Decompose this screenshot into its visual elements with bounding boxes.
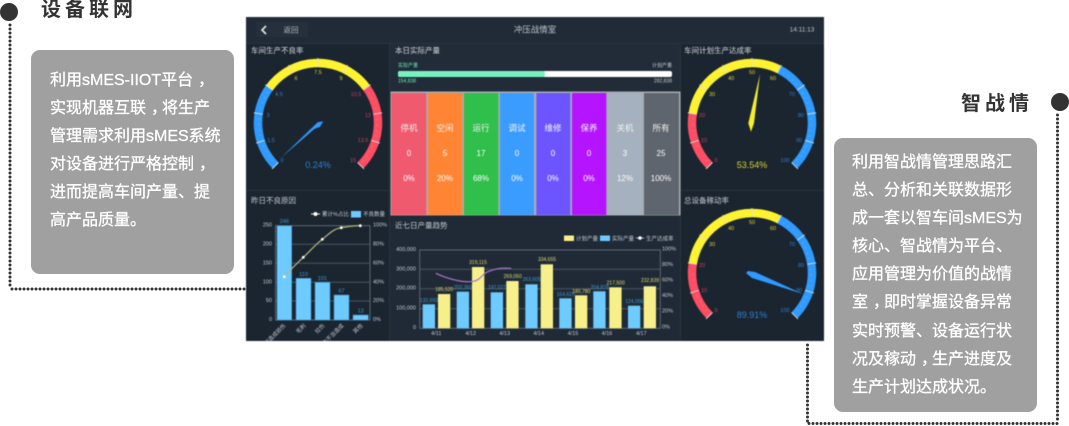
chart legend xyxy=(564,234,674,242)
bar value labels: 185,520 xyxy=(435,287,454,293)
category labels: 拉伤 xyxy=(313,321,327,335)
gauge: overall utilisation rate: 60 xyxy=(770,226,776,232)
bar value labels: 164,620 xyxy=(557,292,575,298)
status: repair: 0 xyxy=(551,149,556,158)
right axis labels: 20% xyxy=(373,298,384,304)
status: maintenance: 0 xyxy=(587,149,592,158)
status: running xyxy=(464,93,498,215)
right axis labels: 40% xyxy=(662,293,673,299)
right axis labels: 100% xyxy=(373,223,387,229)
left axis labels xyxy=(263,223,272,323)
status: debugging: 0% xyxy=(511,174,523,183)
gauge: plan achievement rate: 50 xyxy=(749,70,755,76)
status: powered off: 3 xyxy=(623,149,628,158)
gauge: workshop defect rate: 0 xyxy=(280,158,284,164)
right axis labels xyxy=(373,223,387,323)
pareto bar values xyxy=(280,219,364,314)
text block: 智战情 description: 室 ，即时掌握设备异常 xyxy=(852,294,1012,311)
gauge: workshop defect rate xyxy=(233,38,403,208)
status: running: 68% xyxy=(473,174,489,183)
bar value labels: 132,693 xyxy=(420,298,438,304)
chart legend: 实际产量 xyxy=(612,234,635,242)
text block: 智战情 description: 核心、智战情为平台、 xyxy=(852,238,1012,255)
right axis labels: 100% xyxy=(662,246,676,252)
heading: 智战情: 智战情 xyxy=(961,93,1033,115)
bar value labels: 202,360 xyxy=(454,285,472,291)
gauge: workshop defect rate: 10.5 xyxy=(351,92,361,98)
status: powered off: 关机 xyxy=(616,123,634,133)
pareto bar values: 101 xyxy=(318,276,327,282)
progress labels xyxy=(398,62,672,84)
right axis labels: 80% xyxy=(373,241,384,247)
achievement rate line xyxy=(436,268,511,282)
planned output bars xyxy=(438,264,656,328)
status: powered off xyxy=(608,93,642,215)
text block: 智战情 description: 生产计划达成状况。 xyxy=(852,379,996,396)
left axis labels: 200 xyxy=(263,241,272,247)
header bar xyxy=(256,22,815,37)
progress labels: 282,838 xyxy=(654,78,672,84)
gauge: overall utilisation rate: 50 xyxy=(749,220,755,226)
pareto bar values: 246 xyxy=(280,219,289,225)
gauge: overall utilisation rate: 30 xyxy=(709,242,715,248)
gauge: plan achievement rate: 90 xyxy=(796,138,802,144)
gauge heading: 车间计划生产达成率 xyxy=(684,45,752,55)
text block: 智战情 description: 成一套以智车间sMES为 xyxy=(852,210,1023,227)
status: all: 100% xyxy=(651,174,671,183)
status: debugging: 0 xyxy=(515,149,520,158)
gauge: workshop defect rate: 13.5 xyxy=(358,138,368,144)
chart: yesterday defect pareto xyxy=(251,195,387,359)
gauge: overall utilisation rate: 20 xyxy=(699,263,705,269)
gauge: workshop defect rate: 1.5 xyxy=(267,138,275,144)
status: maintenance: 保养 xyxy=(580,123,598,133)
pareto bars xyxy=(277,226,368,320)
status: repair xyxy=(536,93,570,215)
back label: 返回 xyxy=(284,26,298,34)
gauge: plan achievement rate: 80 xyxy=(798,113,804,119)
left axis labels: 250 xyxy=(263,223,272,229)
status: debugging: 调试 xyxy=(508,123,526,133)
left axis labels: 100,000 xyxy=(396,306,416,312)
right axis labels: 20% xyxy=(662,309,673,315)
status table xyxy=(390,92,680,216)
gauge needle xyxy=(281,121,323,158)
gauge: plan achievement rate: 100 xyxy=(780,158,790,164)
right axis labels xyxy=(662,246,676,330)
status: repair: 0% xyxy=(547,174,559,183)
dashboard screenshot xyxy=(245,16,825,342)
status: running: 运行 xyxy=(472,123,490,133)
panel: today's actual output xyxy=(390,45,680,216)
category labels: 毛刺 xyxy=(294,321,308,335)
status: repair: 维修 xyxy=(544,123,562,133)
progress labels: 实际产量 xyxy=(398,62,418,69)
gauge: plan achievement rate: 20 xyxy=(699,113,705,119)
left axis labels: 50 xyxy=(266,298,272,304)
pareto bar values: 67 xyxy=(338,288,345,294)
status: idle xyxy=(428,93,462,215)
bar value labels xyxy=(420,257,659,305)
bar value labels: 180,780 xyxy=(572,289,591,295)
status: powered off: 12% xyxy=(617,174,633,183)
connector: right dotted line xyxy=(806,114,1059,425)
status: idle: 5 xyxy=(443,149,448,158)
text block: 智战情 description: 况及稼动 ，生产进度及 xyxy=(852,351,1012,368)
gauge: workshop defect rate: 6 xyxy=(294,76,298,82)
status: all xyxy=(644,93,679,215)
text block: 设备联网 description: 利用sMES-IIOT平台 ， xyxy=(50,72,214,89)
right axis labels: 60% xyxy=(373,260,384,266)
gauge: overall utilisation rate xyxy=(667,188,837,358)
gauge: overall utilisation rate: 40 xyxy=(728,226,734,232)
left axis labels: 100 xyxy=(263,279,272,285)
gauge: overall utilisation rate: 80 xyxy=(798,263,804,269)
text block: 设备联网 description: 高产品质量。 xyxy=(50,212,146,229)
date labels: 4/11 xyxy=(431,331,441,337)
pareto bar values: 13 xyxy=(358,308,364,314)
gauge: plan achievement rate: 30 xyxy=(709,92,715,98)
date labels: 4/15 xyxy=(568,331,578,337)
category labels xyxy=(251,321,365,359)
icon: back chevron xyxy=(262,26,266,34)
category labels: 其他 xyxy=(351,321,365,335)
right axis labels: 80% xyxy=(662,262,673,268)
left axis labels: 200,000 xyxy=(396,286,416,292)
left axis labels: 150 xyxy=(263,260,272,266)
gauge needle xyxy=(748,74,760,132)
panel: 设备联网 description xyxy=(31,50,234,274)
bar value labels: 269,050 xyxy=(504,274,522,280)
bar value labels: 124,056 xyxy=(625,299,644,305)
chart legend: 生产达成率 xyxy=(646,234,674,242)
status: maintenance xyxy=(572,93,606,215)
date labels: 4/13 xyxy=(499,331,510,337)
clock: 14:11:13 xyxy=(790,26,815,34)
gauge value: 89.91% xyxy=(737,310,767,320)
gauge: workshop defect rate: 7.5 xyxy=(314,70,322,76)
chart legend: 不良数量 xyxy=(363,210,386,218)
bar value labels: 217,500 xyxy=(607,280,625,286)
date labels: 4/14 xyxy=(533,331,544,337)
gauge needle xyxy=(746,271,803,294)
actual output bars xyxy=(423,284,640,328)
gauge: plan achievement rate: 10 xyxy=(701,138,707,144)
gauge: plan achievement rate xyxy=(667,38,837,208)
left axis labels xyxy=(396,247,416,331)
progress labels: 154,838 xyxy=(398,78,416,84)
chart legend: 累计%占比 xyxy=(322,210,349,218)
gauge: overall utilisation rate: 100 xyxy=(780,308,790,314)
text block: 设备联网 description: 进而提高车间产量、提 xyxy=(50,184,210,201)
date labels: 4/16 xyxy=(602,331,612,337)
date labels: 4/12 xyxy=(465,331,476,337)
status: stopped xyxy=(391,93,426,215)
status: debugging xyxy=(500,93,534,215)
gauge: plan achievement rate: 60 xyxy=(770,76,776,82)
chart: seven day output trend xyxy=(395,220,676,337)
status: stopped: 0 xyxy=(407,149,412,158)
text block: 智战情 description: 总、分析和关联数据形 xyxy=(852,182,1012,199)
bar value labels: 319,115 xyxy=(469,260,487,266)
status: idle: 空闲 xyxy=(436,123,454,133)
pareto bar values: 110 xyxy=(299,272,308,278)
dashboard title: 冲压战情室 xyxy=(514,24,557,34)
right axis labels: 60% xyxy=(662,278,673,284)
gauge: plan achievement rate: 0 xyxy=(714,158,718,164)
status: all: 25 xyxy=(657,149,666,158)
gauge value: 0.24% xyxy=(305,160,331,170)
panel: 智战情 description xyxy=(834,138,1037,412)
gauge: overall utilisation rate: 0 xyxy=(714,308,718,314)
bar value labels: 334,655 xyxy=(538,257,556,263)
status: running: 17 xyxy=(477,149,486,158)
status: stopped: 0% xyxy=(403,174,415,183)
bar value labels: 263,605 xyxy=(523,277,541,283)
chart heading: 近七日产量趋势 xyxy=(395,220,448,230)
gauge: workshop defect rate: 9 xyxy=(339,76,343,82)
left axis labels: 0 xyxy=(413,325,416,331)
gauge heading: 总设备稼动率 xyxy=(684,195,729,205)
icon: left heading dot xyxy=(0,3,18,21)
bar value labels: 232,839 xyxy=(641,278,659,284)
gauge: overall utilisation rate: 10 xyxy=(701,288,707,294)
right axis labels: 0% xyxy=(373,317,381,323)
text block: 设备联网 description: 对设备进行严格控制 ， xyxy=(50,156,215,173)
left axis labels: 0 xyxy=(269,317,272,323)
date labels: 4/17 xyxy=(636,331,647,337)
text block: 设备联网 description: 实现机器互联 ，将生产 xyxy=(50,100,210,117)
gauge: overall utilisation rate: 70 xyxy=(789,242,795,248)
gauge: overall utilisation rate: 90 xyxy=(796,288,802,294)
text block: 设备联网 description: 管理需求利用sMES系统 xyxy=(50,128,221,145)
gauge: workshop defect rate: 3 xyxy=(266,113,270,119)
status: idle: 20% xyxy=(437,174,453,183)
gauge value: 53.54% xyxy=(737,160,767,170)
gauge: workshop defect rate: 4.5 xyxy=(275,92,283,98)
left axis labels: 400,000 xyxy=(396,247,416,253)
text block: 智战情 description: 应用管理为价值的战情 xyxy=(852,266,1012,283)
gauge: workshop defect rate: 12 xyxy=(365,113,371,119)
progress labels: 计划产量 xyxy=(652,62,672,69)
progress bar xyxy=(398,71,672,77)
text block: 智战情 description xyxy=(852,153,1023,396)
bar value labels: 197,027 xyxy=(488,285,506,291)
date labels xyxy=(431,331,647,337)
gauge heading: 车间生产不良率 xyxy=(251,45,304,55)
gauge: workshop defect rate: 15 xyxy=(350,158,356,164)
chart heading: 昨日不良原因 xyxy=(251,195,296,205)
gauge: plan achievement rate: 70 xyxy=(789,92,795,98)
status: stopped: 停机 xyxy=(400,123,418,133)
chart legend: 计划产量 xyxy=(576,234,599,242)
cumulative line xyxy=(283,224,362,278)
right axis labels: 0% xyxy=(662,324,670,330)
text block: 设备联网 description xyxy=(50,71,221,229)
icon: right heading dot xyxy=(1051,93,1069,111)
panel heading: 本日实际产量 xyxy=(395,45,440,55)
text block: 智战情 description: 利用智战情管理思路汇 xyxy=(852,154,1012,171)
bar value labels: 204,878 xyxy=(591,285,609,291)
status: all: 所有 xyxy=(652,123,670,133)
left axis labels: 300,000 xyxy=(396,266,416,272)
connector: left dotted line xyxy=(8,24,246,290)
right axis labels: 40% xyxy=(373,279,384,285)
chart legend xyxy=(311,210,386,218)
text block: 智战情 description: 实时预警、设备运行状 xyxy=(852,323,1012,340)
status: maintenance: 0% xyxy=(583,174,595,183)
gauge: plan achievement rate: 40 xyxy=(728,76,734,82)
